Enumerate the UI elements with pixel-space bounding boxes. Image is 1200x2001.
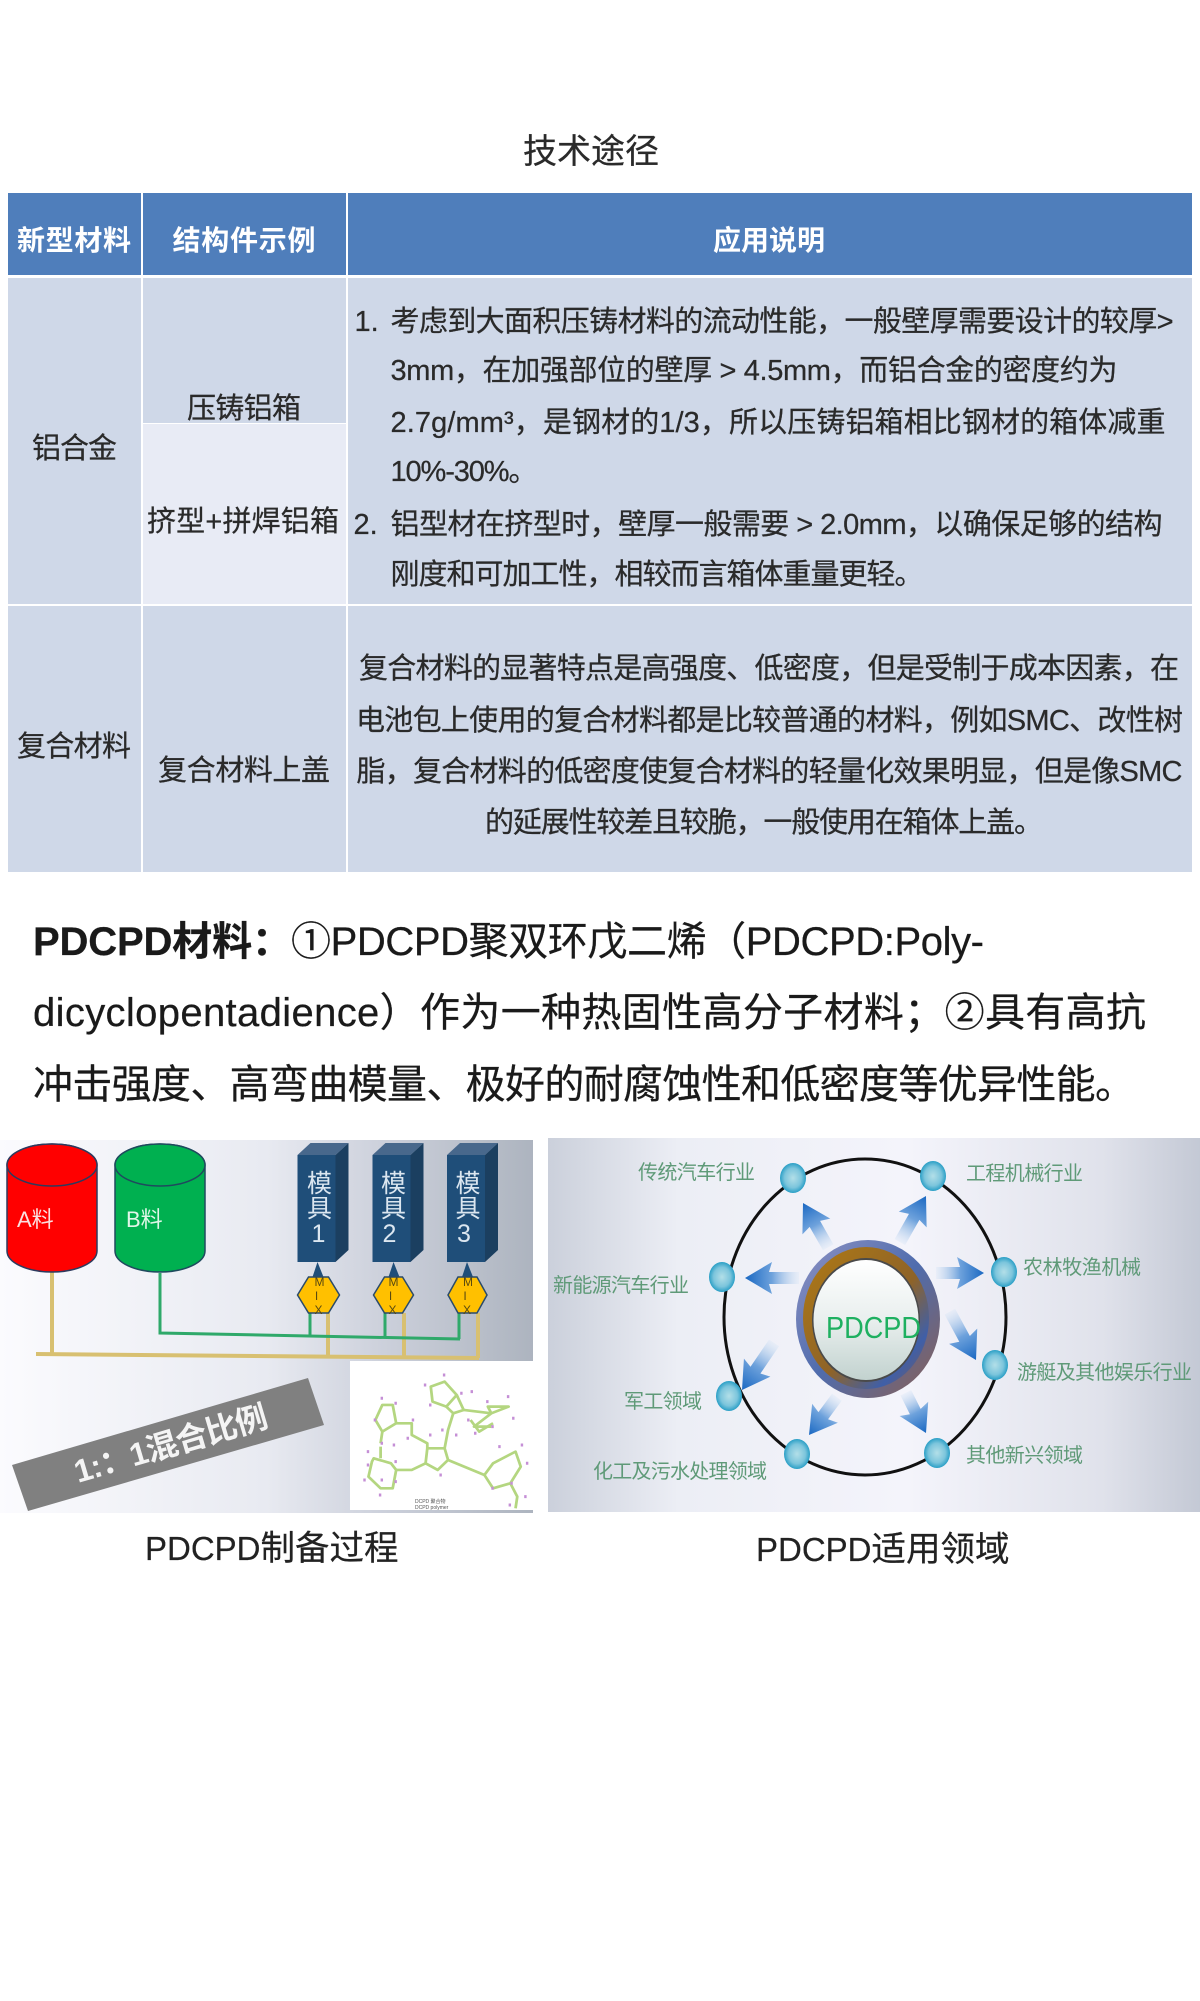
field labels: 工程机械行业: [966, 1162, 1083, 1185]
cylinder: material A: A料: [17, 1207, 54, 1232]
centre PDCPD disc: PDCPD: [826, 1310, 921, 1345]
mould 1 with mixer: M: [314, 1275, 324, 1289]
mould 1 with mixer: [298, 1143, 348, 1317]
nodes: [709, 1161, 1017, 1469]
field labels: 军工领域: [624, 1390, 702, 1413]
table row: aluminium alloy: 10%-30%。: [390, 456, 538, 488]
PDCPD material paragraph: ①PDCPD聚双环戊二烯（PDCPD:Poly-: [291, 920, 984, 964]
table row: aluminium alloy: 压铸铝箱: [187, 392, 301, 425]
mixing ratio banner: 1:：1混合比例: [70, 1398, 272, 1490]
table row: composite material: [8, 606, 1192, 872]
table row: composite material: 复合材料上盖: [158, 754, 330, 787]
cylinder: material B: [115, 1144, 205, 1272]
PDCPD material paragraph: 冲击强度、高弯曲模量、极好的耐腐蚀性和低密度等优异性能。: [33, 1063, 1135, 1107]
table row: aluminium alloy: 3mm，在加强部位的壁厚 > 4.5mm，而铝合金的密度约为: [390, 354, 1118, 387]
field labels: 化工及污水处理领域: [593, 1460, 767, 1483]
mould 3 with mixer: 3: [457, 1220, 471, 1248]
panel: PDCPD application fields: [548, 1138, 1200, 1512]
mould 2 with mixer: X: [388, 1303, 397, 1317]
mould 3 with mixer: I: [463, 1289, 467, 1303]
PDCPD material paragraph: [33, 920, 1146, 1107]
molecule structure image: DCPD 聚合物: [415, 1498, 446, 1505]
mould 3 with mixer: M: [463, 1275, 473, 1289]
mould 3 with mixer: X: [463, 1303, 471, 1317]
table row: aluminium alloy: 铝型材在挤型时，壁厚一般需要 > 2.0mm，以确保足够的结构: [390, 508, 1162, 541]
caption: preparation process: PDCPD制备过程: [145, 1530, 399, 1568]
table header row: 应用说明: [713, 225, 825, 256]
table header row: [8, 193, 1192, 275]
caption: application fields: PDCPD适用领域: [756, 1531, 1010, 1569]
molecule structure image: DCPD polymer: [415, 1505, 449, 1511]
mould 2 with mixer: 2: [383, 1220, 396, 1248]
table row: composite material: 电池包上使用的复合材料都是比较普通的材料，例如SMC、改性树: [356, 704, 1183, 737]
table row: composite material: 的延展性较差且较脆，一般使用在箱体上盖。: [485, 806, 1043, 839]
PDCPD material paragraph: PDCPD材料：: [33, 920, 292, 964]
mould 2 with mixer: 模: [381, 1170, 406, 1198]
table row: aluminium alloy: 刚度和可加工性，相较而言箱体重量更轻。: [390, 558, 924, 591]
table header row: 新型材料: [17, 225, 131, 256]
table row: aluminium alloy: 考虑到大面积压铸材料的流动性能，一般壁厚需要设计的较厚>: [390, 305, 1174, 338]
table row: composite material: 复合材料: [17, 730, 131, 763]
table row: composite material: 脂，复合材料的低密度使复合材料的轻量化效果明显，但是像SMC: [356, 755, 1182, 788]
molecule structure image: [350, 1361, 533, 1511]
pipes: material B: [160, 1273, 460, 1339]
mould 2 with mixer: [372, 1143, 424, 1317]
pipes: material A: [36, 1272, 479, 1358]
table row: composite material: 复合材料的显著特点是高强度、低密度，但是受制于成本因素，在: [359, 652, 1179, 685]
arrows: [729, 1188, 990, 1444]
table row: aluminium alloy: 2.7g/mm³，是钢材的1/3，所以压铸铝箱相比钢材的箱体减重: [390, 406, 1166, 439]
outer ellipse: [724, 1159, 1006, 1475]
mould 1 with mixer: 具: [307, 1195, 332, 1223]
table row: aluminium alloy: 铝合金: [32, 432, 117, 465]
mould 3 with mixer: [447, 1143, 498, 1317]
field labels: [553, 1161, 1192, 1483]
mould 1 with mixer: X: [314, 1303, 323, 1317]
table header row: 结构件示例: [172, 225, 316, 256]
centre PDCPD disc: [796, 1240, 940, 1398]
mould 3 with mixer: 具: [455, 1195, 481, 1223]
field labels: 新能源汽车行业: [553, 1274, 689, 1297]
field labels: 传统汽车行业: [638, 1161, 755, 1184]
title: 技术途径: [523, 133, 659, 171]
cylinder: material B: B料: [126, 1207, 163, 1232]
mould 2 with mixer: I: [389, 1289, 392, 1303]
field labels: 农林牧渔机械: [1023, 1256, 1141, 1279]
table: [8, 193, 1192, 872]
table row: aluminium alloy: [8, 278, 1192, 604]
mould 1 with mixer: 模: [307, 1170, 332, 1198]
mould 2 with mixer: M: [388, 1275, 398, 1289]
mould 1 with mixer: I: [315, 1289, 318, 1303]
mixing ratio banner: [12, 1378, 324, 1511]
table row: aluminium alloy: 1.: [354, 306, 379, 338]
mould 3 with mixer: 模: [455, 1170, 481, 1198]
table row: aluminium alloy: 挤型+拼焊铝箱: [147, 505, 339, 538]
cylinder: material A: [7, 1144, 97, 1272]
mould 2 with mixer: 具: [381, 1195, 406, 1223]
panel: PDCPD preparation process: [0, 1140, 533, 1513]
table row: aluminium alloy: 2.: [354, 509, 378, 541]
field labels: 其他新兴领域: [966, 1444, 1083, 1467]
field labels: 游艇及其他娱乐行业: [1017, 1361, 1192, 1384]
PDCPD material paragraph: dicyclopentadience）作为一种热固性高分子材料；②具有高抗: [33, 991, 1146, 1035]
mould 1 with mixer: 1: [312, 1220, 325, 1248]
